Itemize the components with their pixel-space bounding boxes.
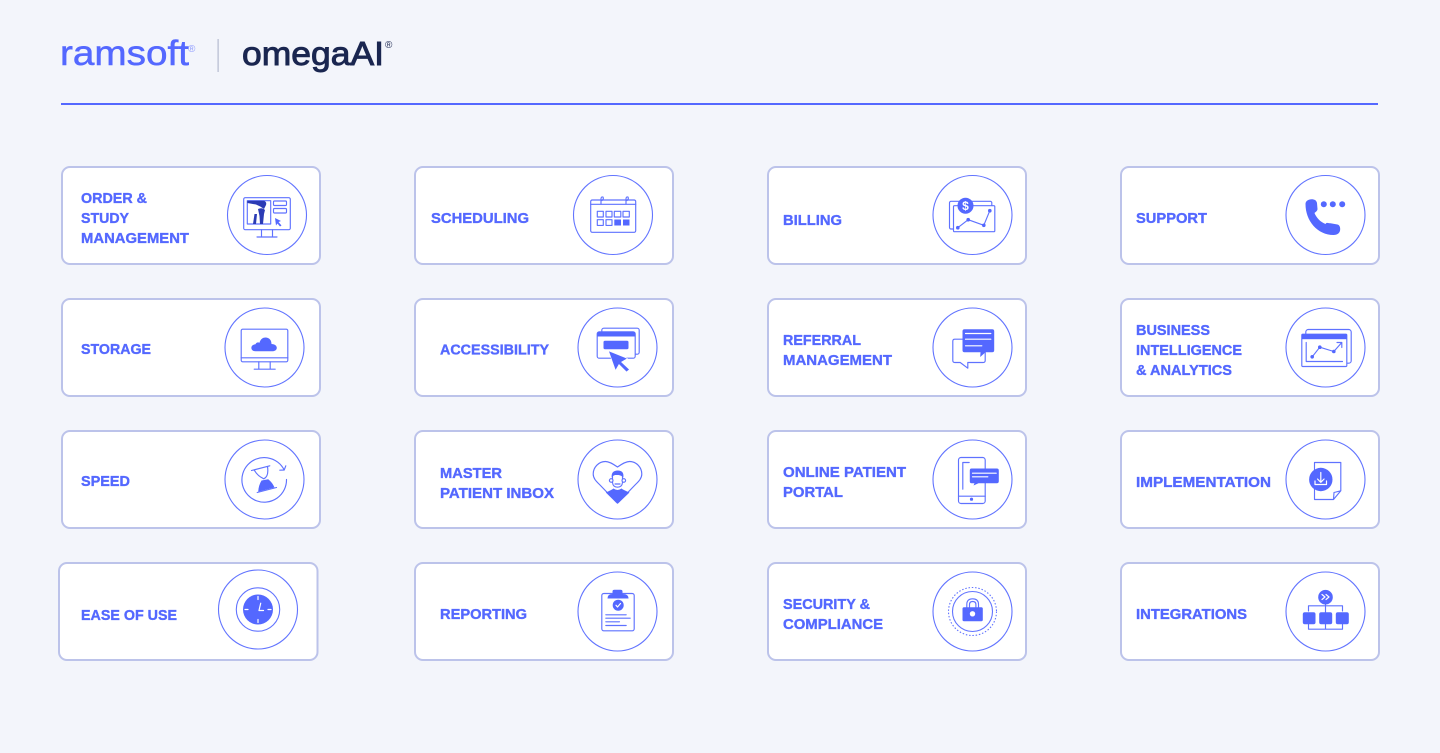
label: master patient inbox: MASTER (440, 466, 503, 482)
icon: billing chart with dollar (933, 176, 1012, 254)
label: online patient portal: ONLINE PATIENT (783, 465, 906, 481)
label: master patient inbox: PATIENT INBOX (440, 486, 554, 502)
label: accessibility: ACCESSIBILITY (440, 342, 549, 358)
label: integrations: INTEGRATIONS (1136, 607, 1247, 623)
icon: chat bubbles (933, 308, 1012, 387)
panel: speed (62, 431, 320, 528)
icon: padlock (933, 572, 1012, 651)
label: storage: STORAGE (81, 342, 151, 358)
panel: accessibility (415, 299, 673, 396)
logo: omegaAI: ® (385, 40, 393, 51)
panel: referral management (768, 299, 1026, 396)
panel: billing (768, 167, 1026, 264)
label: referral management (783, 333, 892, 369)
panel: reporting (415, 563, 673, 660)
label: implementation: IMPLEMENTATION (1136, 475, 1271, 491)
panel: scheduling (415, 167, 673, 264)
label: scheduling: SCHEDULING (431, 211, 529, 227)
logo: ramsoft: ® (188, 44, 196, 55)
panel: ease of use (59, 563, 318, 660)
label: referral management: REFERRAL (783, 333, 861, 349)
label: support: SUPPORT (1136, 211, 1207, 227)
panel: security and compliance (768, 563, 1026, 660)
logo: ramsoft: ramsoft (60, 34, 189, 73)
panel: online patient portal (768, 431, 1026, 528)
label: order and study management: STUDY (81, 211, 129, 227)
icon: calendar (574, 176, 652, 254)
label: security and compliance (783, 597, 883, 633)
icon: phone with dots (1286, 176, 1365, 254)
logo: omegaAI: omegaAI (242, 35, 384, 72)
label: online patient portal: PORTAL (783, 485, 843, 501)
divider (218, 39, 219, 72)
label: referral management: MANAGEMENT (783, 353, 892, 369)
icon: monitor with x-ray (228, 176, 306, 254)
label: business intelligence and analytics (1136, 323, 1242, 379)
panel: master patient inbox (415, 431, 673, 528)
icon: hourglass with arrow (225, 440, 304, 519)
label: business intelligence and analytics: INTELLIGENCE (1136, 343, 1242, 359)
icon: heart with patient (578, 440, 657, 519)
icon: integration network (1286, 572, 1365, 651)
label: business intelligence and analytics: BUSINESS (1136, 323, 1210, 339)
label: security and compliance: SECURITY & (783, 597, 871, 613)
panel: storage (62, 299, 320, 396)
icon: browser with cursor (578, 308, 657, 387)
label: reporting: REPORTING (440, 607, 527, 623)
label: billing: BILLING (783, 213, 842, 229)
icon: phone with message (933, 440, 1012, 519)
panel: support (1121, 167, 1379, 264)
icon: monitor with cloud (225, 308, 304, 387)
header rule (61, 103, 1378, 105)
panel: order and study management (62, 167, 320, 264)
label: order and study management: ORDER & (81, 191, 148, 207)
header: logos (60, 34, 393, 73)
label: master patient inbox (440, 466, 554, 502)
label: security and compliance: COMPLIANCE (783, 617, 883, 633)
panel: business intelligence and analytics (1121, 299, 1379, 396)
icon: document download (1286, 440, 1365, 519)
icon: billing chart with dollar: $ (962, 199, 969, 213)
label: ease of use: EASE OF USE (81, 608, 177, 624)
icon: clock (218, 570, 298, 649)
icon: clipboard (578, 572, 657, 651)
panel: integrations (1121, 563, 1379, 660)
panel: implementation (1121, 431, 1379, 528)
label: online patient portal (783, 465, 906, 501)
icon: analytics window (1286, 308, 1365, 387)
label: order and study management: MANAGEMENT (81, 231, 189, 247)
label: order and study management (81, 191, 189, 247)
label: speed: SPEED (81, 474, 130, 490)
label: business intelligence and analytics: & ANALYTICS (1136, 363, 1232, 379)
